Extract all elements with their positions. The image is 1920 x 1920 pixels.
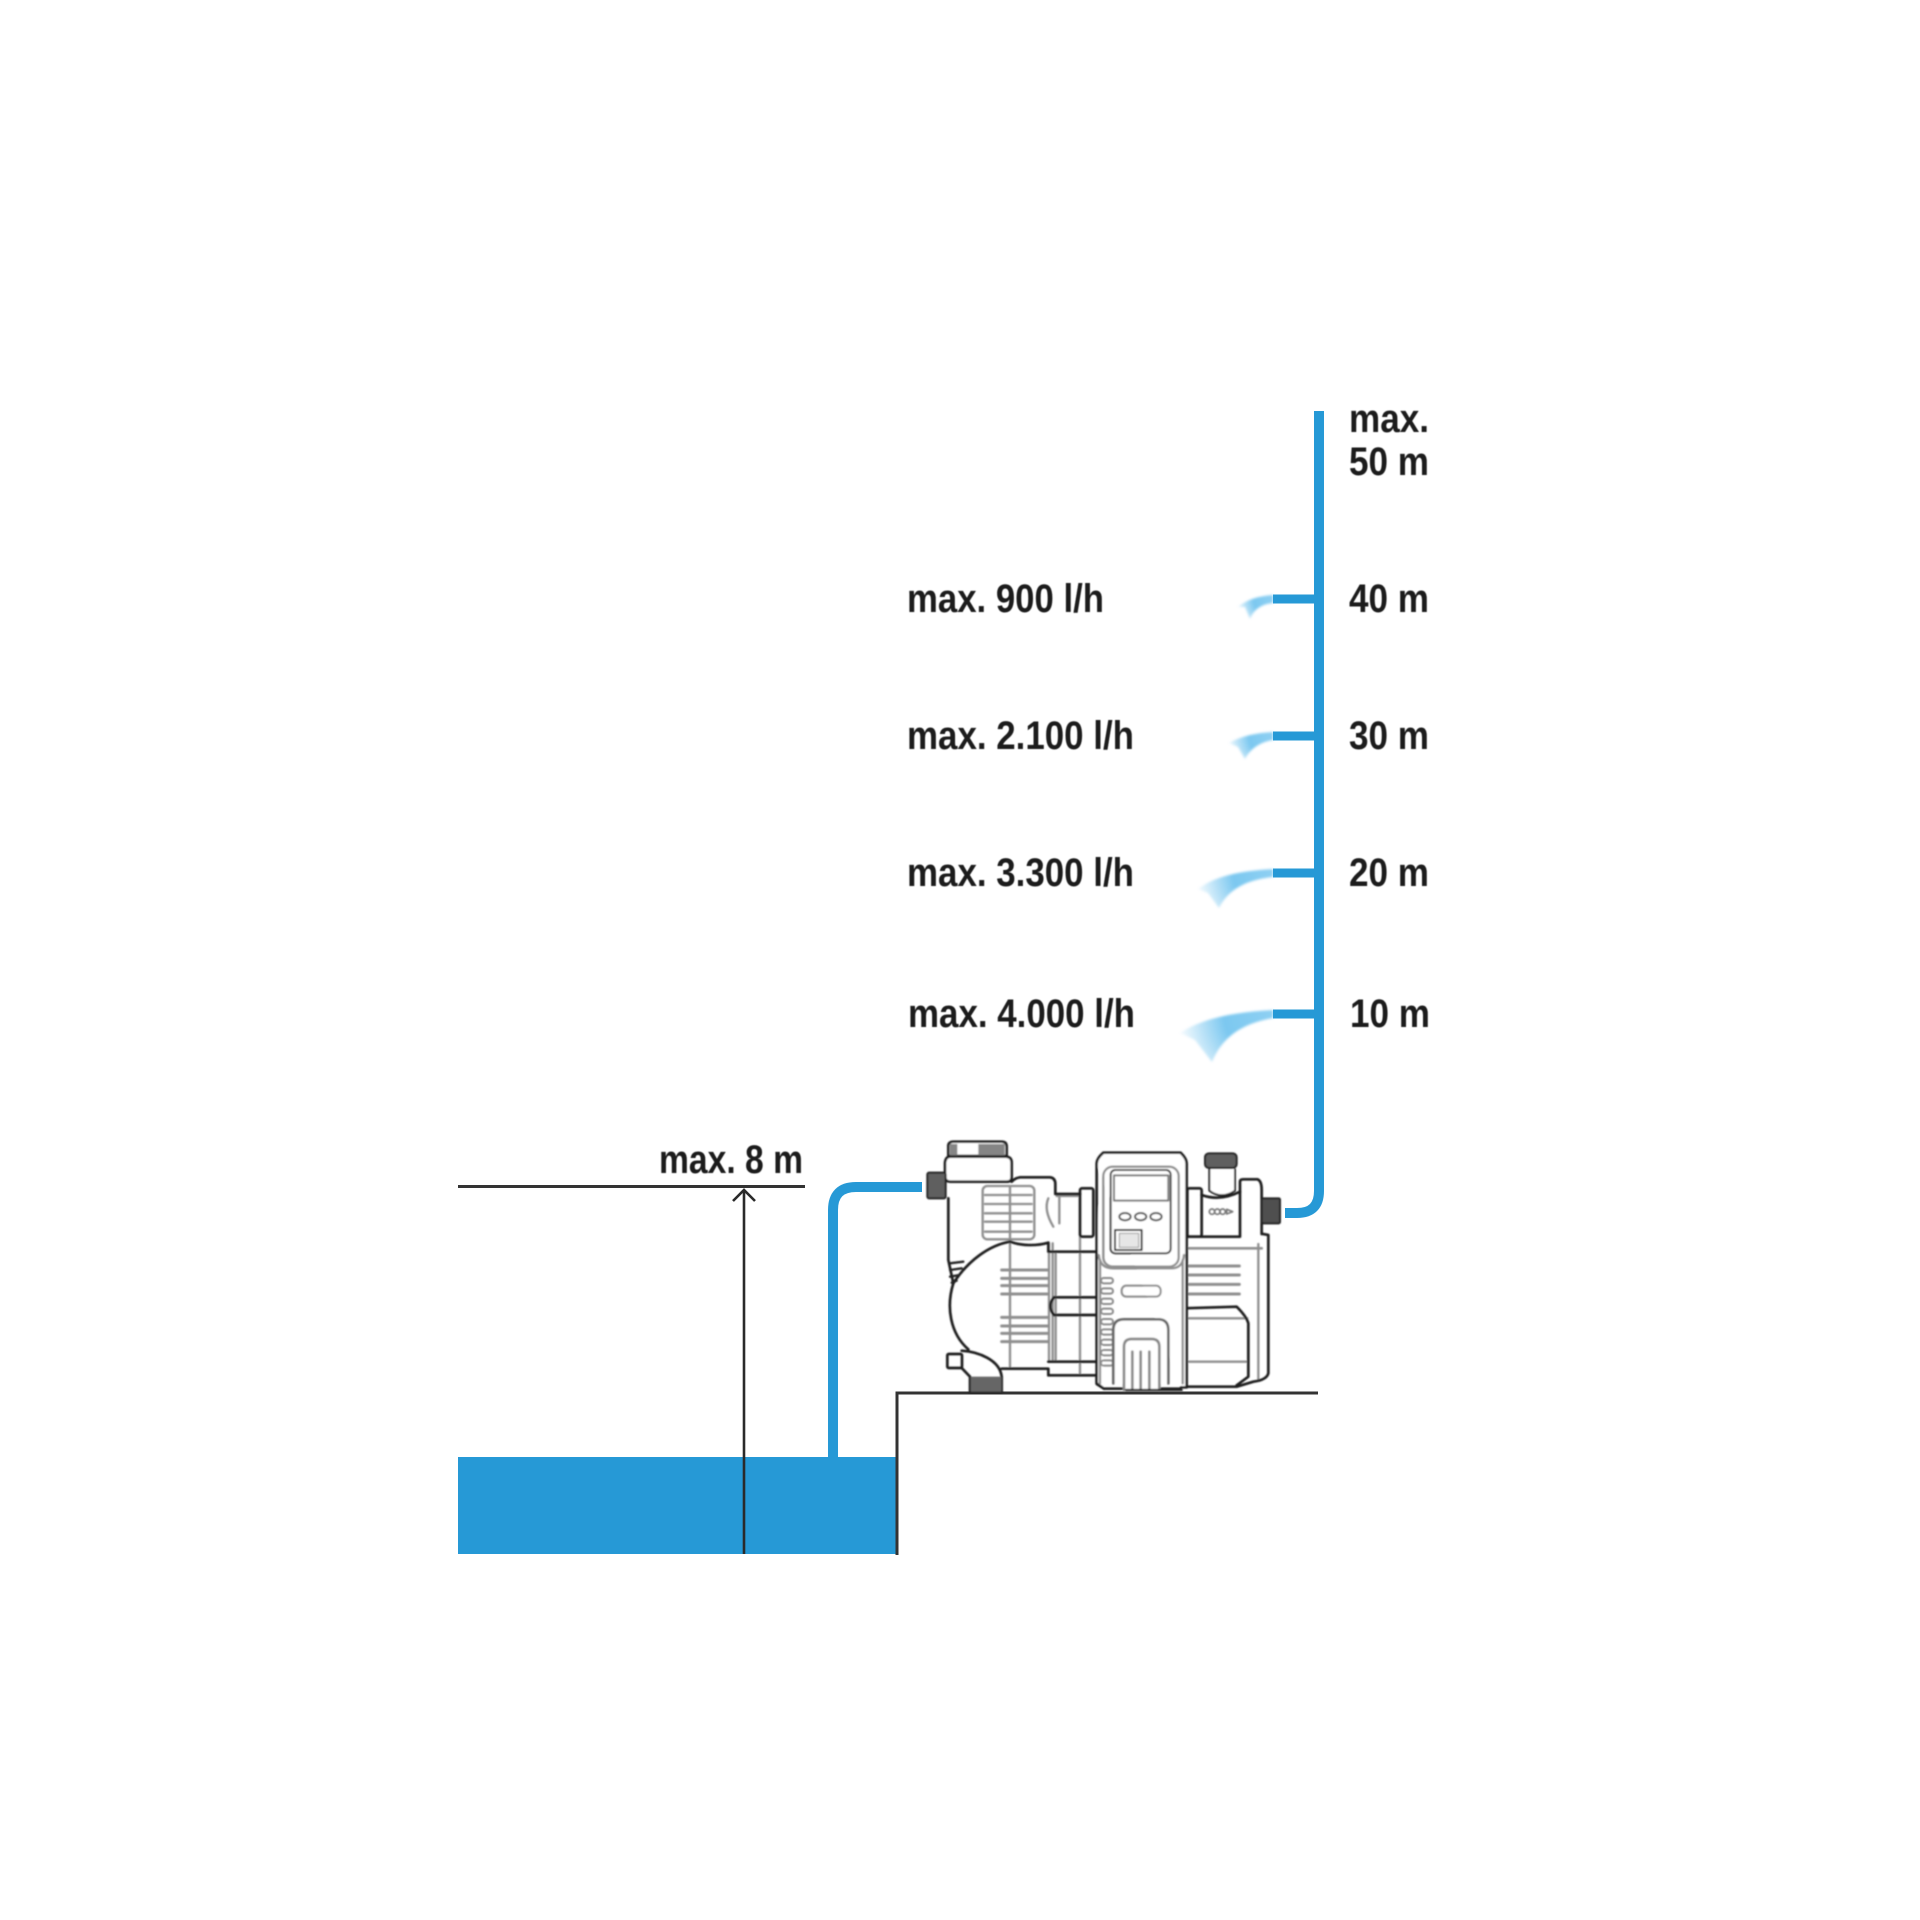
suction height arrow [733, 1190, 755, 1554]
switch rocker [1119, 1233, 1139, 1247]
power switch [1115, 1230, 1142, 1250]
delivery pipe [1285, 411, 1319, 1213]
handle recess [1113, 1319, 1168, 1383]
display frame [1111, 1170, 1171, 1253]
label max.: max. [1349, 397, 1429, 441]
label plate [1122, 1286, 1161, 1297]
flow rate labels [907, 577, 1135, 1036]
top fill port [1205, 1153, 1237, 1195]
pump casing outline [947, 1177, 1268, 1392]
height labels [1349, 397, 1430, 1036]
control buttons [1119, 1213, 1162, 1220]
branch pipe at 40 m [1273, 594, 1319, 604]
control unit housing [1097, 1153, 1187, 1389]
spray at 20 m [1198, 869, 1273, 908]
drive housing hatching [950, 1262, 963, 1283]
flow 900 l/h: max. 900 l/h [907, 577, 1104, 621]
filter cap [945, 1142, 1012, 1182]
outlet branch at 40 m [1238, 594, 1319, 619]
control unit grey outlines [1099, 1167, 1184, 1383]
drain plug thread [971, 1377, 1001, 1392]
port cap [1205, 1153, 1237, 1168]
cap body [948, 1142, 1007, 1156]
ground step line [897, 1393, 1318, 1555]
switch frame [1115, 1230, 1142, 1250]
spray at 30 m [1229, 732, 1273, 759]
water reservoir [458, 1457, 897, 1554]
label 40 m: 40 m [1349, 577, 1429, 621]
icon: garden pump [927, 1142, 1280, 1392]
branch pipe at 20 m [1273, 868, 1319, 878]
cap collar [945, 1157, 1012, 1182]
label 20 m: 20 m [1349, 851, 1429, 895]
label 30 m: 30 m [1349, 714, 1429, 758]
spray at 40 m [1238, 595, 1273, 619]
casing grey details [983, 1186, 1262, 1380]
branch pipe at 30 m [1273, 732, 1319, 740]
port neck [1209, 1169, 1235, 1195]
outlet branch at 10 m [1180, 1010, 1319, 1062]
grip ribs [1132, 1352, 1149, 1389]
label 10 m: 10 m [1350, 992, 1430, 1036]
flow 3.300 l/h: max. 3.300 l/h [907, 851, 1134, 895]
cap grip shading [950, 1144, 1005, 1155]
ventilation slots [1101, 1278, 1113, 1366]
handle grip [1124, 1339, 1159, 1390]
inlet connector [927, 1173, 946, 1198]
branch pipe at 10 m [1273, 1010, 1319, 1018]
flow 2.100 l/h: max. 2.100 l/h [907, 714, 1134, 758]
outlet branch at 20 m [1198, 868, 1319, 908]
suction pipe [833, 1187, 922, 1460]
outlet branch at 30 m [1229, 732, 1319, 759]
housing base shadow [1126, 1386, 1182, 1393]
flow 4.000 l/h: max. 4.000 l/h [908, 992, 1135, 1036]
spray at 10 m [1180, 1010, 1273, 1062]
max suction level line [458, 1185, 805, 1188]
grip outline [1124, 1339, 1159, 1390]
outlet connector [1262, 1198, 1280, 1223]
port arrow marking [1209, 1209, 1233, 1214]
display screen [1114, 1175, 1168, 1201]
suction height label: max. 8 m [659, 1138, 803, 1182]
label 50 m: 50 m [1349, 440, 1429, 484]
